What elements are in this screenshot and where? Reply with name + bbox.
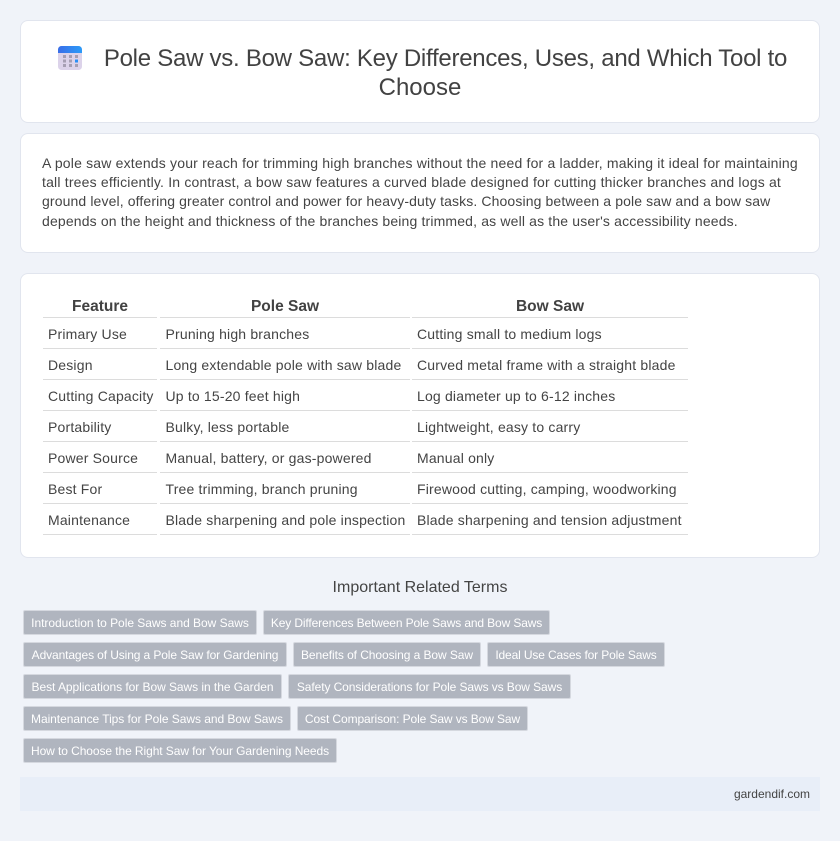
row: power source: Power Source [48,450,138,466]
tag [297,706,528,731]
row: power source: Manual only [417,450,494,466]
tag [23,706,291,731]
tag: Cost Comparison: Pole Saw vs Bow Saw [305,712,520,726]
row: design: Design [48,357,93,373]
tag: Benefits of Choosing a Bow Saw [301,648,473,662]
tag: How to Choose the Right Saw for Your Gardening Needs [31,744,329,758]
row: portability: Bulky, less portable [166,419,289,435]
text block: introduction: depends on the height and thickness of the branches being trimmed, as well as the user's accessibility needs. [42,213,738,229]
table header: Pole Saw [251,298,319,315]
text block: introduction: A pole saw extends your reach for trimming high branches without the need for a ladder, making it ideal for maintaining [42,155,798,171]
tag: Advantages of Using a Pole Saw for Gardening [32,648,278,662]
icon: calendar [58,46,82,70]
row: power source [43,450,688,473]
tag [23,674,282,699]
row: best for [43,481,688,504]
row: design: Long extendable pole with saw blade [166,357,401,373]
text block: introduction: ground level, offering greater control and power for heavy-duty tasks. Choosing between a pole saw and a bow saw [42,193,770,209]
row: cutting capacity: Up to 15-20 feet high [166,388,300,404]
row: cutting capacity: Log diameter up to 6-12 inches [417,388,615,404]
row: cutting capacity: Cutting Capacity [48,388,154,404]
title: Pole Saw vs. Bow Saw: Key Differences, Uses, and Which Tool to [104,45,787,72]
panel: header [20,20,820,123]
row: power source: Manual, battery, or gas-powered [166,450,372,466]
table header: Feature [72,298,128,315]
row: maintenance: Maintenance [48,512,130,528]
row: maintenance [43,512,688,535]
table header: Bow Saw [516,298,584,315]
related term tags [23,610,665,763]
row: maintenance: Blade sharpening and tension adjustment [417,512,682,528]
footer bar [20,777,820,811]
tag [263,610,550,635]
row: primary use: Pruning high branches [166,326,309,342]
row: best for: Firewood cutting, camping, woodworking [417,481,677,497]
row: cutting capacity [43,388,688,411]
tag: Introduction to Pole Saws and Bow Saws [31,616,249,630]
tag: Safety Considerations for Pole Saws vs Bow Saws [297,680,562,694]
tag [293,642,481,667]
row: maintenance: Blade sharpening and pole inspection [166,512,406,528]
tag [23,610,257,635]
text block: introduction [42,155,798,229]
tag: Best Applications for Bow Saws in the Garden [32,680,273,694]
row: primary use: Cutting small to medium logs [417,326,602,342]
panel: comparison table [20,273,820,558]
row: portability: Portability [48,419,111,435]
title [104,45,787,101]
tag: Ideal Use Cases for Pole Saws [495,648,657,662]
row: primary use: Primary Use [48,326,127,342]
row: portability [43,419,688,442]
panel: introduction [20,133,820,253]
row: portability: Lightweight, easy to carry [417,419,580,435]
heading: important related terms: Important Related Terms [333,579,507,596]
comparison table [43,298,688,535]
footer source: gardendif.com [734,787,810,801]
text block: introduction: tall trees efficiently. In contrast, a bow saw features a curved blade designed for cutting thicker branches and logs at [42,174,781,190]
row: best for: Tree trimming, branch pruning [166,481,358,497]
tag [288,674,571,699]
row: design [43,357,688,380]
tag [23,642,287,667]
row: design: Curved metal frame with a straight blade [417,357,676,373]
row: best for: Best For [48,481,102,497]
tag: Key Differences Between Pole Saws and Bow Saws [271,616,542,630]
tag [23,738,337,763]
tag: Maintenance Tips for Pole Saws and Bow Saws [31,712,283,726]
table header [43,298,688,318]
tag [487,642,665,667]
row: primary use [43,326,688,349]
title: Choose [379,74,461,101]
